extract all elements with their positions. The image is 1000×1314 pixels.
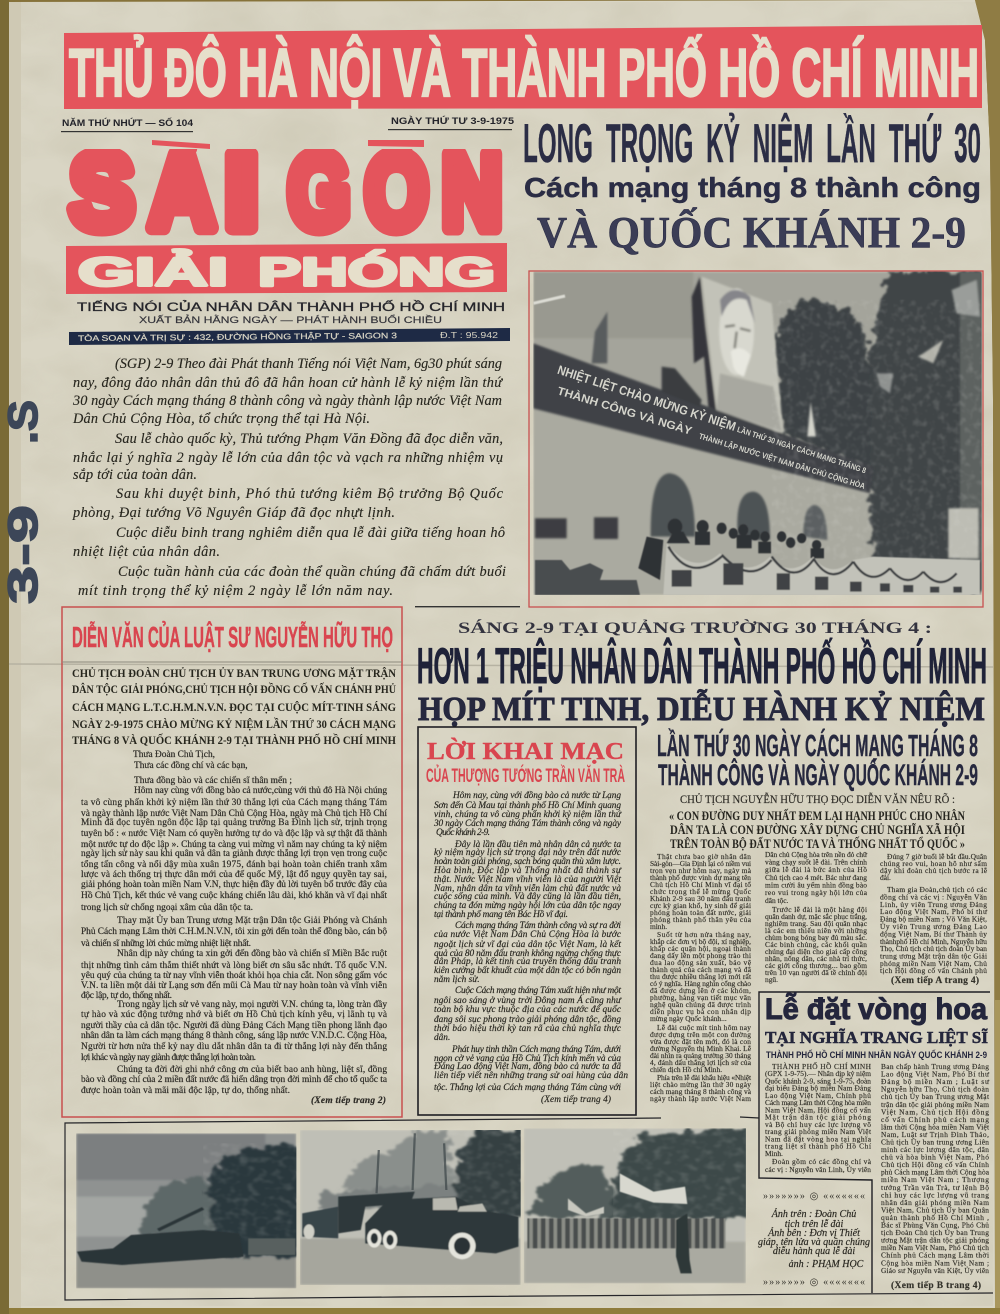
photo caption: ảnh : PHẠM HỌC [789, 1259, 864, 1270]
column 1: Khánh 2-9 sau 30 năm đấu tranh [650, 894, 751, 903]
speech body text: ta vô cùng phấn khởi kỷ niệm lần thứ 30 thắng lợi của Cách mạng tháng Tám [81, 797, 388, 808]
column 2: Chủ tịch cao 4 mét. Bác như đang [765, 873, 867, 882]
speech body text: Thưa Đoàn Chủ Tịch, [133, 750, 215, 760]
sub tagline: XUẤT BẢN HẰNG NGÀY — PHÁT HÀNH BUỔI CHIỀU [139, 314, 442, 325]
speech body text: và ngày thành lập nước Việt Nam Dân Chủ Cộng Hòa, ngày mà Chủ tịch Hồ Chí [81, 808, 387, 819]
wreath article columns: trang giải phóng miền Nam Việt [765, 1127, 872, 1136]
speech body text: lược và ách thống trị thực dân mới của đế quốc Mỹ, lật đổ ngụy quyền tay sai, [81, 869, 387, 880]
opening speech body: vinh, chúng ta vô cùng phấn khởi kỷ niệm lần thứ [434, 809, 622, 820]
column 1: Sài-gòn—Gia Định lại có niềm vui [650, 859, 751, 868]
banner lettering in photo: NHIỆT LIỆT CHÀO MỪNG KỶ NIỆM [556, 362, 738, 434]
opening speech body: kỷ niệm ngày lịch sử trọng đại này trên đất nước [434, 847, 622, 858]
column 1: phóng thành phố thân yêu của [650, 915, 752, 924]
wreath article columns: chủ và hòa bình Việt Nam, Phó [881, 1153, 989, 1162]
column 1: Lễ đài cuộc mít tinh hôm nay [657, 1023, 751, 1032]
logo: Sài Gòn [66, 140, 502, 236]
column 2: nghiêm trang. Sau đội quân nhạc [765, 919, 868, 928]
masthead: Sài Gòn Giải Phóng: GIẢI [78, 248, 228, 294]
speech body text: lợi khác và ngày nay giành được thắng lợi hoàn toàn. [81, 1052, 256, 1063]
wreath article columns: chỉ huy các lực lượng vũ trang [881, 1190, 989, 1199]
column 3: đài. [880, 873, 891, 882]
wreath article columns: Đảng bộ miền Nam ; Luật sư [881, 1077, 990, 1086]
column 1: Suốt từ hơn nửa tháng nay, [657, 930, 751, 939]
issue date: NGÀY THỨ TƯ 3-9-1975 [391, 115, 515, 127]
column 3: Đảng bộ miền Nam ; Võ Văn Kiệt, [880, 915, 987, 924]
opening speech body: liên tiếp viết nên những trang sử oai hùng của dân [434, 1070, 628, 1081]
headline block: rally at 30 April Square [417, 618, 987, 851]
column 3 [880, 852, 988, 986]
column 1 [650, 852, 752, 1103]
column 1: Phía trên lễ đài khẩu hiệu «Nhiệt [657, 1073, 752, 1082]
opening speech body: của nước Việt Nam Dân Chủ Cộng Hòa là bước [434, 930, 622, 940]
speech body text: yêu quý của chúng ta từ nay vĩnh viễn thoát khỏi họa chia cắt. Non sông gấm vóc [81, 970, 387, 981]
wreath article columns: Cách mạng Lâm thời Cộng hòa miền [765, 1098, 871, 1107]
wreath article columns [765, 1061, 990, 1291]
opening speech body: 30 ngày Cách mạng tháng Tám thành công và ngày [433, 819, 622, 829]
column 1: đài nhìn ra quảng trường 30 tháng [650, 1051, 751, 1060]
opening speech body: đang sôi sục phong trào giải phóng dân tộc, đồng [434, 1014, 621, 1025]
speech body text: Phủ Cách mạng Lâm thời C.H.M.N.V.N, tôi xin gởi đến toàn thể đồng bào, cán bộ [81, 926, 387, 937]
opening speech body: Phát huy tinh thần Cách mạng tháng Tám, dưới [451, 1044, 621, 1055]
wreath article columns: Bác sĩ Phùng Văn Cung, Phó Chủ [881, 1220, 989, 1230]
wreath article columns: lâm thời Cộng hòa miền Nam Việt [881, 1122, 990, 1131]
column 1: vừa được đặt tên mới, đó là con [650, 1037, 751, 1046]
logo: Sài Gòn: I [225, 131, 258, 251]
column 2: Dân chủ Cộng hòa trên nền đỏ chữ [765, 850, 868, 859]
wreath article columns: và Bộ chỉ huy các lực lượng võ [765, 1120, 871, 1129]
column 1: khắp các đơn vị bộ đội, xí nghiệp, [650, 937, 751, 946]
lead article text: sắp tới của toàn dân. [73, 467, 197, 483]
speech intro in capitals: NGÀY 2-9-1975 CHÀO MỪNG KỶ NIỆM LẦN THỨ 30 CÁCH MẠNG [72, 716, 396, 731]
column 2: chúng đại diện cho giai cấp công [765, 947, 867, 956]
wreath article columns: Nam đã đặt vòng hoa tại nghĩa [765, 1134, 872, 1144]
wreath article columns: cố vấn Chính phủ cách mạng [881, 1115, 989, 1124]
speech body text: giải phóng hoàn toàn miền Nam V.N, thực hiện đầy đủ lời tuyên bố trước đây của [81, 879, 388, 890]
wreath article columns: Việt Nam, Chủ tịch Ủy ban Quân [881, 1204, 989, 1214]
wreath article columns: nhân dân giải phóng miền Nam [881, 1198, 989, 1207]
column 3: thànhphố Hồ chí Minh, Nguyễn hữu [880, 937, 987, 946]
issue number [61, 117, 194, 132]
spine date rotated: 3-9 [0, 505, 46, 604]
speech body text: Hôm nay cùng với đồng bào cả nước,cùng với thủ đô Hà Nội chúng [134, 785, 387, 796]
lead article text: Cuộc diễu binh trang nghiêm diễn qua lễ đài giữa tiếng hoan hô [116, 525, 505, 541]
speech body text: Thưa đồng bào và các chiến sĩ thân mến ; [134, 775, 292, 786]
speech body text: Hồ Chủ Tịch, kết thúc vẻ vang cuộc kháng chiến lâu dài, khó khăn và vĩ đại nhất [81, 890, 387, 901]
opening speech body: Nam, nhân dân ta vĩnh viễn làm chủ đất nước và [433, 883, 621, 894]
rally report: three columns [650, 850, 988, 1103]
opening speech body: thời báo hiệu thời kỳ tan rã của chủ nghĩa thực [434, 1024, 622, 1034]
column 1: thu được nhiều thắng lợi mới rất [650, 972, 752, 981]
wreath article columns: Nam Việt Nam, Hội đồng cố vấn [765, 1106, 871, 1114]
photo: marching crowd with banners [524, 1127, 753, 1283]
column 3: trung ương Mặt trận dân tộc Giải [880, 952, 987, 961]
wreath article columns: (Xem tiếp B trang 4) [891, 1280, 981, 1291]
address bar [69, 328, 510, 345]
wreath article columns: Lao động Việt Nam, Phó Bí thư [881, 1070, 990, 1078]
column 3: Linh, ủy viên Trung ương Đảng [880, 900, 987, 909]
column 1: cách mạng tháng 8 thành công và [650, 1087, 752, 1096]
column 1: khắp các quận hội, ngoại thành [650, 944, 751, 953]
logo: Sài Gòn: S [70, 131, 134, 251]
wreath article columns: chủ tịch Ủy ban Trung ương Mặt [881, 1091, 990, 1101]
speech body text: trong lịch sử chống ngoại xâm của dân tộc ta. [81, 902, 253, 913]
speech intro in capitals: THÁNG 8 VÀ QUỐC KHÁNH 2-9 TẠI THÀNH PHỐ HỒ CHÍ MINH [72, 732, 396, 747]
column 1: đã được dựng lên ở các khóm, [650, 986, 751, 995]
photo: missile trucks on parade [300, 1130, 527, 1285]
column 1: mình. [650, 922, 667, 931]
opening speech subtitle: CỦA THƯỢNG TƯỚNG TRẦN VĂN TRÀ [426, 765, 625, 787]
column 1: đang dấy lên một phong trào thi [650, 951, 751, 960]
wreath article columns: tướng Trần văn Trà, tư lệnh Bộ [881, 1183, 989, 1192]
wreath article columns: (GPX 1-9-75).— Nhân dịp kỷ niệm [765, 1069, 871, 1078]
column 2: là các em thiếu niên với những [765, 926, 867, 935]
column 1: đua lao động sản xuất, bảo vệ [650, 958, 752, 967]
column 1: phóng hoàn toàn đất nước, giải [650, 908, 751, 917]
column 2: Trước lễ đài là một hàng đội [772, 905, 867, 914]
banner lettering in photo: THÀNH LẬP NƯỚC VIỆT NAM DÂN CHỦ CỘNG HÒA [698, 432, 866, 491]
wreath article columns: quản thành phố Hồ Chí Minh , [881, 1213, 989, 1222]
opening speech body: Cuộc Cách mạng tháng Tám xuất hiện như một [455, 985, 621, 996]
wreath article title: Lễ đặt vòng hoa [765, 992, 987, 1026]
wreath article columns: trận dân tộc giải phóng miền Nam [881, 1100, 989, 1109]
photo caption: Ảnh trên : Đoàn Chủ [771, 1208, 856, 1220]
wreath article columns: Việt Nam, Chủ tịch Hội đồng [881, 1107, 989, 1116]
opening speech title: LỜI KHAI MẠC [427, 738, 624, 765]
banner lettering in photo [556, 362, 868, 491]
speech body text: và chiến sĩ những lời chúc mừng nhiệt liệt nhất. [81, 938, 251, 949]
speech body text: tự hào và xúc động tưởng nhớ và biết ơn Hồ Chủ tịch kính yêu, vị lãnh tụ và [81, 1009, 388, 1020]
photo caption: tịch trên lễ đài [785, 1219, 844, 1230]
masthead: Sài Gòn Giải Phóng [66, 131, 510, 345]
speech intro in capitals: CÁCH MẠNG L.T.C.H.M.N.V.N. ĐỌC TẠI CUỘC MÍT-TINH SÁNG [72, 700, 396, 714]
wreath article columns: phủ Cách mạng Lâm thời Cộng hòa [881, 1168, 990, 1177]
speech body text: nhân dân ta làm cách mạng tháng 8 thành công, sáng lập nước V.N.D.C. Cộng Hòa, [81, 1031, 387, 1041]
panel: speech of lawyer Nguyen Huu Tho [62, 607, 402, 1117]
headline: Long trọng kỷ niệm [523, 112, 981, 257]
masthead: Sài Gòn Giải Phóng: PHÓNG [258, 248, 495, 294]
speech body text: V.N. ta liền một dải từ Lạng sơn đến mũi Cà Mau từ nay hoàn toàn và vĩnh viễn [81, 980, 387, 991]
column 3: phóng miền Nam Việt Nam, Chủ [880, 959, 987, 968]
column 1: 4, đánh dấu thắng lợi lịch sử của [650, 1058, 752, 1067]
wreath article columns: Minh. [765, 1149, 783, 1158]
column 1: phường, hàng vạn tiết mục văn [650, 993, 751, 1002]
wreath article columns: Chủ tịch Hội đồng cố vấn Chính [881, 1160, 989, 1169]
column 3: Đúng 7 giờ buổi lễ bắt đầu.Quân [887, 852, 987, 861]
opening speech body [433, 790, 628, 1105]
panel: wreath laying ceremony [759, 992, 990, 1293]
speech body text: Thay mặt Ủy ban Trung ương Mặt trận Dân tộc Giải Phóng và Chánh [117, 914, 387, 926]
column 1: có ý nghĩa. Hàng nghìn cổng chào [650, 979, 751, 988]
speech body text: Nhân dịp này chúng ta xin gởi đến đồng bào và chiến sĩ Miền Bắc ruột [117, 948, 387, 959]
lead article text: Sau lễ chào quốc kỳ, Thủ tướng Phạm Văn Đồng đã đọc diễn văn, [115, 431, 503, 447]
column 3: động Việt Nam, Bí thư Thành ủy [880, 929, 987, 938]
opening speech body: tại thành phố mang tên Bác Hồ vĩ đại. [434, 909, 568, 920]
speech body text: Người từ hơn nửa thế kỷ nay dìu dắt nhân dân ta đi từ thắng lợi này đến thắng [81, 1041, 387, 1052]
opening speech body: (Xem tiếp trang 4) [541, 1094, 611, 1105]
opening speech body: Hòa bình, Độc lập và Thống nhất đã thành sự [433, 865, 622, 876]
lead article text: nhắc lại ý nghĩa 2 ngày lễ lớn của dân tộc và vạch ra những nhiệm vụ [73, 450, 503, 466]
headline block: rally at 30 April Square: SÁNG 2-9 TẠI QUẢNG TRƯỜNG 30 THÁNG 4 : [458, 618, 932, 637]
column 2 [765, 850, 868, 984]
column 2: nhân, nông dân, các nhà trí thức, [765, 954, 867, 963]
issue date [388, 115, 515, 130]
wreath article columns: Cộng hòa miền Nam Việt Nam ; [881, 1258, 989, 1267]
speech intro in capitals [72, 666, 397, 747]
opening speech body: Đây là lần đầu tiên mà nhân dân cả nước ta [454, 839, 621, 850]
speech intro in capitals: CHỦ TỊCH ĐOÀN CHỦ TỊCH ỦY BAN TRUNG ƯƠNG MẶT TRẬN [72, 666, 397, 680]
column 3: chúng reo vui, hoan hô như sấm [880, 859, 987, 868]
opening speech body: Cách mạng tháng Tám thành công và sự ra đời [455, 921, 621, 931]
photo caption: Ảnh bên : Đơn vị Thiết [767, 1227, 860, 1239]
lead article text: 30 ngày Cách mạng tháng 8 thành công và ngày thành lập nước Việt Nam [72, 393, 502, 409]
column 1: thành quả của cách mạng và đã [650, 965, 752, 974]
wreath subtitle: TẠI NGHĨA TRANG LIỆT SĨ [765, 1028, 988, 1047]
speech body text: (Xem tiếp trang 2) [311, 1095, 386, 1106]
wreath article columns: Chính phủ Cách mạng Lâm thời [881, 1251, 989, 1260]
column 2: mỉm cười âu yếm nhìn đồng bào [765, 881, 867, 890]
column 3: Ủy viên Trung ương Đảng Lao [880, 921, 987, 931]
logo: Sài Gòn: N [442, 131, 502, 251]
speech body text: thịt những tình cảm thắm thiết nhứt và lòng biết ơn sâu sắc nhứt. Tổ quốc V.N. [81, 960, 387, 971]
column 2: các giới công thương... bao gồm [765, 961, 867, 970]
panel: opening speech [418, 727, 636, 1115]
column 3: Tham gia Đoàn,chủ tịch có các [887, 885, 988, 894]
column 2: Các binh chủng, các khối quần [765, 940, 867, 949]
wreath article columns: ương Mặt trận dân tộc giải phóng [881, 1236, 989, 1245]
column 1: cực kỳ gian khổ, hy sinh để giải [650, 901, 751, 910]
opening speech body: toàn bộ khu vực thuộc địa của các nước đế quốc [434, 1004, 622, 1015]
wreath article columns: Quốc khánh 2-9, sáng 1-9-75, đoàn [765, 1076, 871, 1086]
opening speech body: dân. [434, 1033, 450, 1043]
wreath article columns: Ban chấp hành Trung ương Đảng [881, 1062, 989, 1071]
lead article text: phòng, Đại tướng Võ Nguyên Giáp đã đọc nhựt lịnh. [72, 505, 395, 521]
opening speech body: năm lịch sử. [434, 975, 480, 985]
tagline: TIẾNG NÓI CỦA NHÂN DÂN THÀNH PHỐ HỒ CHÍ MINH [77, 299, 505, 314]
opening speech body: kiên cường bất khuất của một dân tộc có bốn ngàn [434, 965, 621, 976]
photo caption [758, 1191, 870, 1288]
column 1: đường Nguyễn thị Minh Khai. Lễ [650, 1044, 752, 1053]
column 1: mừng ngày Quốc khánh... [650, 1014, 727, 1023]
column 2: chùm bong bóng bay đủ màu sắc. [765, 933, 867, 942]
column 2: ngũ. [765, 975, 778, 984]
wreath article columns: miền Nam Việt Nam, Phó Chủ tịch [881, 1243, 989, 1252]
opening speech body: Quốc khánh 2-9. [436, 827, 490, 838]
column 3: Lao động Việt Nam, Phó bí thư [880, 907, 988, 916]
column 3: đồng chí và các vị : Nguyễn Văn [880, 892, 987, 901]
opening speech body: Hôm nay, cùng với đồng bào cả nước từ Lạng [452, 790, 621, 801]
issue number: NĂM THỨ NHỨT — SỐ 104 [62, 117, 194, 129]
hero photo: Ho Chi Minh portrait and rostrum [529, 271, 987, 607]
wreath article columns: Nguyễn hữu Thọ, Chủ tịch đoàn [881, 1085, 989, 1094]
opening speech body: cuộc sống của mình. Và đây cũng là lần đầu tiên, [434, 891, 621, 902]
speech body text: bào và đồng chí của 2 miền đất nước đã hiến dâng trọn đời mình để cho tổ quốc ta [81, 1074, 388, 1085]
column 2: vàng chạy suốt lễ đài. Trên chính [765, 858, 867, 867]
speech body text: tổng tấn công và nổi dậy mùa xuân 1975, đánh bại hoàn toàn chiến tranh xâm [81, 859, 388, 870]
wreath article columns: đại biểu Đảng bộ miền Nam Đảng [765, 1084, 871, 1093]
photo frame: bottom strip border [65, 1117, 993, 1300]
logo: Sài Gòn: À [149, 131, 215, 251]
wreath article columns: THÀNH PHỐ HỒ CHÍ MINH [772, 1061, 872, 1071]
top red banner with headline [64, 25, 982, 111]
banner lettering in photo: THÀNH CÔNG VÀ NGÀY [556, 384, 694, 438]
wreath article columns: trang liệt sĩ thành phố Hồ Chí [765, 1142, 871, 1151]
speech body text: tuyên bố : « nước Việt Nam có quyền hưởng tự do và độc lập và sự thật đã thành [81, 828, 387, 839]
column 2: giữa lễ đài là bức ảnh của Hồ [765, 865, 867, 874]
lead article text [72, 356, 506, 599]
speech body text: một nước tự do độc lập ». Chúng ta càng vui mừng vì năm nay chúng ta kỷ niệm [81, 840, 388, 850]
wreath article columns: Mặt trận dân tộc giải phóng [765, 1113, 871, 1122]
wreath article columns: Giáo sư Nguyễn văn Kiệt, Ủy viên [881, 1265, 989, 1275]
masthead: Sài Gòn Giải Phóng: Đ.T : 95.942 [440, 331, 499, 340]
opening speech body: Sơn đến Cà Mau tại thành phố Hồ Chí Minh quang [434, 800, 621, 811]
column 2: trên 10 vạn người đã tề chỉnh đội [765, 968, 867, 977]
photo caption: »»»»»»» ◎ ««««««« [763, 1277, 865, 1288]
column 1: được dựng trên một con đường [650, 1030, 751, 1039]
speech heading: DIỄN VĂN CỦA LUẬT SƯ NGUYỄN HỮU THỌ [72, 620, 393, 654]
opening speech body: quả của 80 năm đấu tranh không ngừng chống thực [434, 948, 622, 959]
column 1: diễn phục vụ bà con nhân dịp [650, 1007, 751, 1016]
quote [669, 808, 965, 851]
column 1: liệt chào mừng lần thứ 30 ngày [650, 1080, 751, 1089]
opening speech body: chúng ta đón mừng ngày hội lớn của dân tộc ngay [434, 901, 622, 911]
red bar: Giải Phóng [66, 243, 507, 294]
masthead: Sài Gòn Giải Phóng: TÒA SOẠN VÀ TRỊ SỰ : 432, ĐƯỜNG HỒNG THẬP TỰ - SAIGON 3 [78, 330, 398, 343]
logo: Sài Gòn: Ò [365, 131, 428, 251]
photo caption: giáp, tên lửa và quần chúng [758, 1237, 870, 1248]
speech body text: Chúng ta đời đời ghi nhớ công ơn của biết bao anh hùng, liệt sĩ, đồng [117, 1064, 387, 1075]
column 1: nghệ quần chúng đã được trình [650, 1000, 751, 1009]
column 2: quân danh dự, mặc sắc phục trắng, [765, 912, 867, 921]
column 1: Thật chưa bao giờ nhân dân [657, 852, 751, 861]
wreath article columns: tịch Đoàn Chủ tịch Ủy ban Trung [881, 1227, 989, 1237]
wreath article columns: các vị : Nguyễn văn Linh, Ủy viên [765, 1164, 871, 1174]
column 3: (Xem tiếp A trang 4) [891, 975, 979, 986]
spine date rotated [0, 400, 46, 604]
subheading: Cách mạng tháng 8 thành công [524, 172, 981, 203]
speech body text: Thưa các đồng chí và các bạn, [134, 760, 248, 771]
wreath article columns: minh các lực lượng dân tộc, dân [881, 1145, 989, 1154]
speech body text: người thầy của cả dân tộc. Người đã dùng Đảng Cách Mạng tiền phong lãnh đạo [81, 1020, 387, 1031]
column 2: reo vui trong ngày hội lớn của [765, 888, 868, 897]
photo caption: diễu hành qua lễ đài [773, 1246, 855, 1257]
logo: Sài Gòn: G [288, 131, 350, 251]
photo: tanks on parade [76, 1133, 302, 1288]
column 1: chức trọng thể lễ mừng Quốc [650, 887, 752, 896]
speech body text: được hoàn toàn và mãi mãi độc lập, tự do, thống nhất. [81, 1085, 290, 1096]
lead article text: nay, đông đảo nhân dân thủ đô đã hân hoan cử hành lễ kỷ niệm lần thứ [73, 375, 503, 391]
speech body text: ngày lịch sử này sau khi quân và dân ta giành được thắng lợi trọn vẹn trong cuộc [81, 848, 387, 859]
opening speech body: tộc. Thắng lợi của Cách mạng tháng Tám cùng với [434, 1082, 621, 1093]
lead article text: Dân Chủ Cộng Hòa, tổ chức trọng thể tại Hà Nội. [72, 411, 370, 427]
speech body text [81, 750, 388, 1106]
opening speech body: hoàn toàn giải phóng, sạch bóng quân thù xâm lược. [434, 857, 621, 867]
opening speech body: ngôi sao sáng ở vùng trời Đông nam Á cũng như [434, 994, 622, 1006]
column 2: dân tộc. [765, 896, 789, 905]
lead article text: Cuộc tuần hành của các đoàn thể quần chúng đã chấm dứt buổi [118, 564, 506, 580]
speech body text: độc lập, tự do, thống nhất. [81, 990, 172, 1001]
column 1: trọn vẹn như hôm nay, ngày mà [650, 866, 752, 875]
lead article text: Sau khi duyệt binh, Phó thủ tướng kiêm Bộ trưởng Bộ Quốc [116, 486, 504, 502]
column 1: ngày thành lập nước Việt Nam [650, 1094, 751, 1103]
rule above the rally headline [415, 606, 520, 607]
column 3: dậy khi đoàn chủ tịch bước ra lễ [880, 866, 988, 875]
column 1: chiến dịch Hồ chí Minh. [650, 1065, 722, 1074]
opening speech body: thật. Nước Việt Nam vĩnh viễn là của người Việt [434, 874, 621, 885]
wreath article columns: Đoàn gồm có các đồng chí và [772, 1157, 872, 1166]
column 1: Chủ tịch Hồ Chí Minh vĩ đại tổ [650, 880, 751, 889]
column 3: tịch Hội đồng cố vấn Chánh phủ [880, 966, 987, 975]
opening speech body: ngoặt lịch sử vĩ đại của dân tộc Việt Nam, là kết [434, 939, 621, 950]
column 3: Thọ, Chủ tịch chủ tịch đoàn Ủy ban [880, 943, 987, 953]
lead article text: (SGP) 2-9 Theo đài Phát thanh Tiếng nói Việt Nam, 6g30 phút sáng [115, 356, 502, 372]
speech body text: Trong ngày lịch sử vẻ vang này, mọi người V.N. chúng ta, lòng tràn đầy [117, 999, 387, 1010]
banner lettering in photo: LẦN THỨ 30 NGÀY CÁCH MẠNG THÁNG 8 [736, 424, 868, 475]
wreath article columns: Chủ tịch Ủy ban trung ương Liên [881, 1136, 989, 1146]
opening speech body: dân Pháp, là kết tinh của truyền thống đấu tranh [434, 956, 621, 967]
lead article text: nhiệt liệt của nhân dân. [73, 544, 220, 560]
column 1: thành phố được vinh dự mang tên [650, 873, 751, 882]
opening speech body: ngọn cờ vẻ vang của Hồ Chủ Tịch kính mến và của [434, 1053, 621, 1064]
wreath article columns: miền Nam Việt Nam ; Thượng [881, 1175, 989, 1184]
photo caption: »»»»»»» ◎ ««««««« [763, 1191, 865, 1202]
lead article text: mít tinh trọng thể kỷ niệm 2 ngày lễ lớn năm nay. [78, 583, 393, 599]
attribution line: CHỦ TỊCH NGUYỄN HỮU THỌ ĐỌC DIỄN VĂN NÊU RÕ : [680, 791, 955, 806]
wreath article columns: Lao động Việt Nam, Chính phủ [765, 1091, 871, 1100]
spine date rotated: .S [0, 400, 46, 444]
opening speech body: Đảng Lao động Việt Nam, đồng bào cả nước ta đã [433, 1061, 621, 1072]
speech body text: Minh đã đọc tuyên ngôn độc lập tại quảng trường Ba Đình lịch sử, trịnh trọng [81, 818, 387, 828]
subheading serif: VÀ QUỐC KHÁNH 2-9 [537, 207, 966, 257]
wreath article columns: Nam, Luật sư Trịnh Đình Thảo, [881, 1130, 989, 1139]
speech intro in capitals: DÂN TỘC GIẢI PHÓNG,CHỦ TỊCH HỘI ĐỒNG CỐ VẤN CHÁNH PHỦ [72, 681, 397, 696]
